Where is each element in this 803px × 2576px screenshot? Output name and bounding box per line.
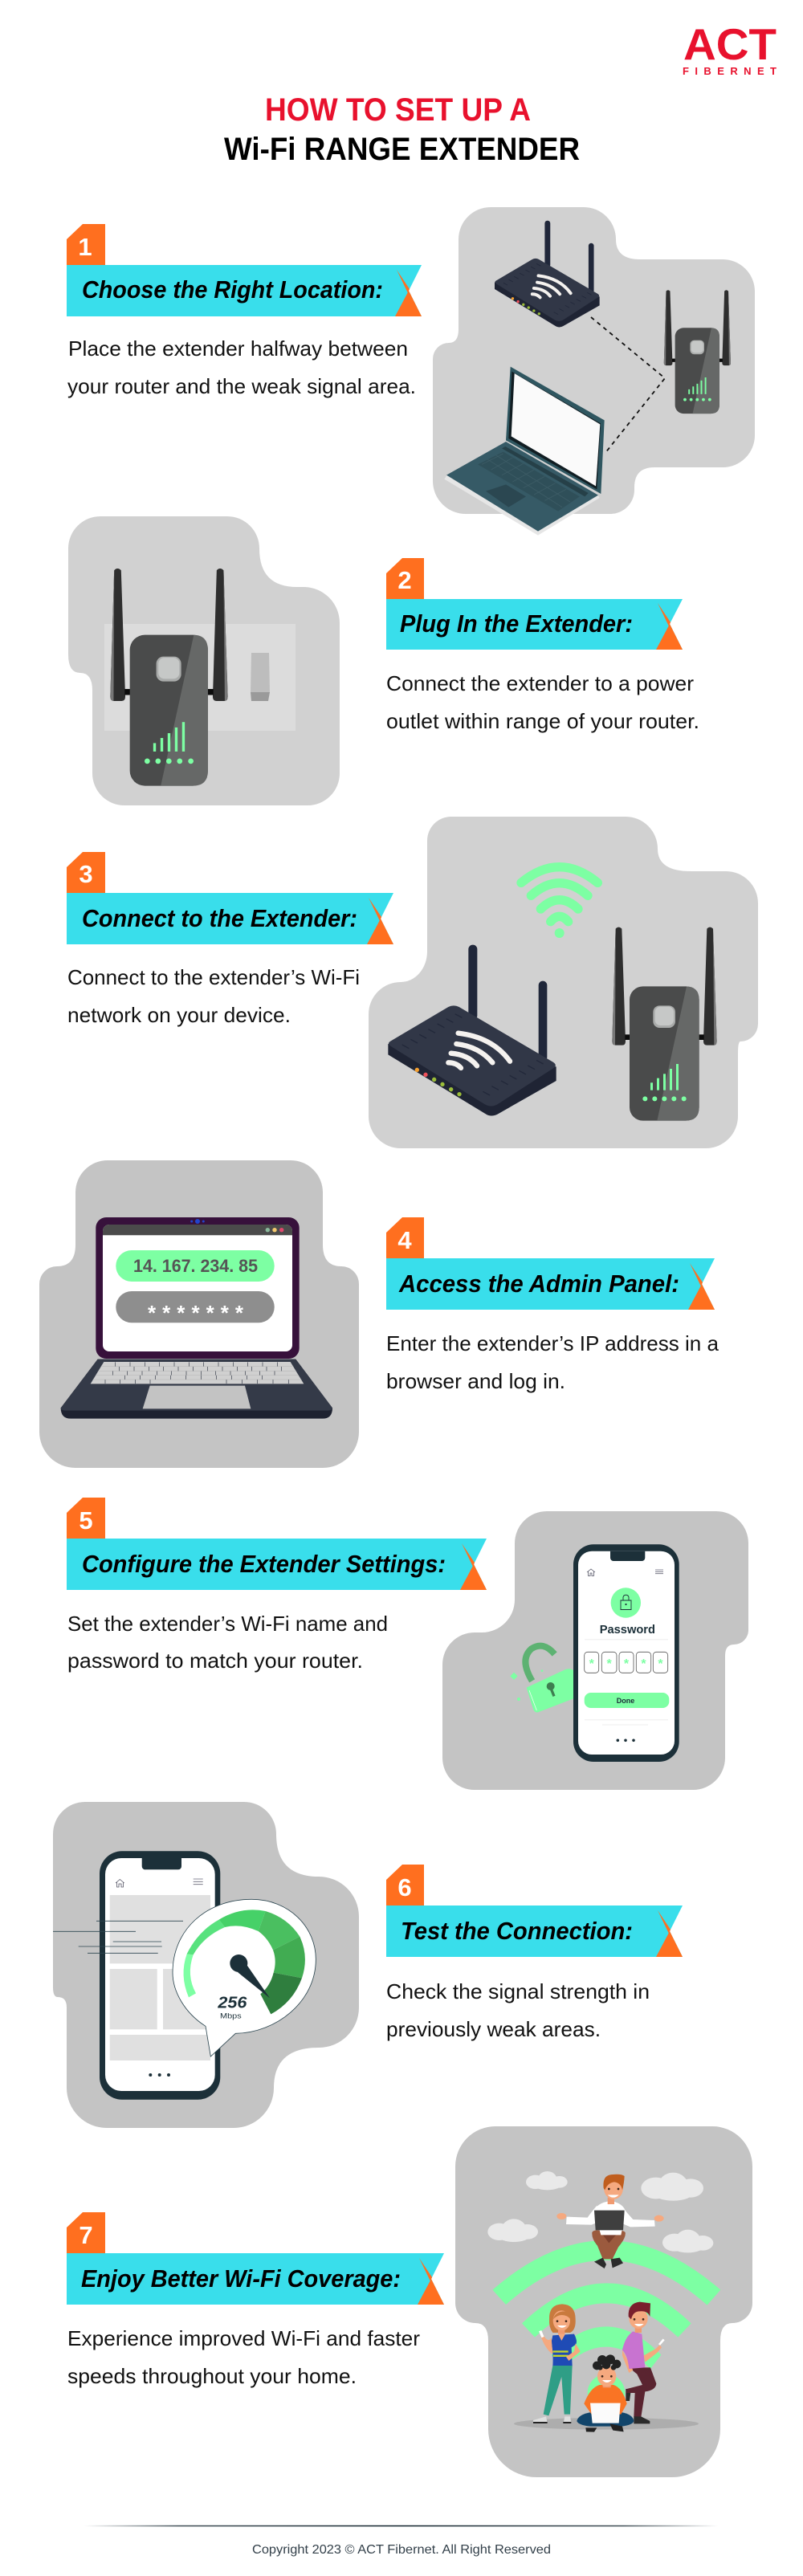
step 7 description: speeds throughout your home. [67,2364,357,2388]
wall plate [104,624,296,731]
step 4 heading banner [386,1258,715,1310]
speedometer bubble: Mbps [220,2011,242,2020]
step 2 illustration panel [68,516,340,805]
step 4 illustration panel [39,1160,359,1468]
icon: laptop with login form [61,1217,332,1419]
step 2 heading banner: Plug In the Extender: [400,609,633,638]
step 3 number badge: 3 [79,860,93,888]
dashed connection lines [591,317,665,454]
step 4 number badge [386,1217,424,1258]
logo: ACT Fibernet: ACT [683,19,777,69]
step 5 description: password to match your router. [67,1649,363,1673]
speedometer bubble: 256 [217,1994,247,2012]
step 6 heading banner: Test the Connection: [401,1917,633,1945]
icon: phone with password screen: * [658,1657,663,1671]
title: HOW TO SET UP A [265,92,531,128]
step 3 description: network on your device. [67,1003,291,1027]
step 4 description: browser and log in. [386,1369,565,1393]
icon: phone with password screen: Password [600,1623,655,1636]
step 4 description [386,1331,719,1393]
icon: extender [110,569,228,786]
icon: router [388,945,556,1115]
step 5 description: Set the extender’s Wi-Fi name and [67,1612,388,1636]
step 6 description: Check the signal strength in [386,1979,650,2003]
title: Wi-Fi RANGE EXTENDER [224,132,580,167]
step 5 description [67,1612,388,1673]
step 7 description: Experience improved Wi-Fi and faster [67,2326,420,2350]
step 4 heading banner: Access the Admin Panel: [398,1270,679,1298]
icon: phone with password screen: * [641,1657,646,1671]
password field [116,1291,275,1325]
wifi arcs [492,2240,720,2411]
step 5 heading banner [67,1539,487,1590]
IP address field: 14. 167. 234. 85 [133,1256,258,1276]
icon: extender [664,290,731,414]
step 1 heading banner: Choose the Right Location: [82,275,383,304]
person: woman with phone [533,2304,581,2423]
step 3 heading banner [67,893,393,944]
logo: ACT Fibernet: FIBERNET [683,65,777,77]
step 5 heading banner: Configure the Extender Settings: [82,1550,446,1578]
step 4 description: Enter the extender’s IP address in a [386,1331,719,1355]
step 1 description: Place the extender halfway between [68,336,408,361]
step 7 illustration panel [455,2126,752,2477]
icon: phone with password screen: * [624,1657,630,1671]
step 2 heading banner [386,599,683,650]
icon: phone with password screen: Done [617,1697,634,1705]
icon: router [495,221,600,328]
step 7 heading banner [67,2253,444,2305]
step 2 number badge: 2 [397,566,412,594]
step 1 number badge: 1 [78,233,92,261]
step 4 number badge: 4 [397,1226,412,1254]
icon: phone with password screen: * [606,1657,612,1671]
step 6 description: previously weak areas. [386,2017,601,2041]
step 6 description [386,1979,650,2041]
laptop base [61,1359,332,1419]
icon: extender [612,927,717,1121]
step 3 description: Connect to the extender’s Wi-Fi [67,965,360,989]
step 7 number badge [67,2212,105,2253]
step 3 description [67,965,360,1027]
icon: phone with speed test [100,1851,220,2100]
icon: phone with password screen: * [589,1657,595,1671]
step 5 illustration panel [442,1511,748,1790]
step 6 illustration panel [53,1802,359,2128]
person: man on top with laptop [556,2175,664,2268]
step 2 description: outlet within range of your router. [386,709,699,733]
step 1 heading banner [67,265,422,316]
illustration: people on wifi signal [487,2171,720,2432]
step 7 heading banner: Enjoy Better Wi-Fi Coverage: [81,2264,401,2293]
footer copyright: Copyright 2023 © ACT Fibernet. All Right Reserved [252,2543,551,2557]
password field: ******* [148,1301,244,1325]
step 3 number badge [67,852,105,893]
clouds [487,2171,713,2252]
step 6 number badge: 6 [397,1873,412,1901]
step 7 description [67,2326,420,2388]
icon: phone with password screen [573,1544,679,1762]
step 7 number badge: 7 [79,2221,93,2249]
person: seated man with laptop [577,2354,634,2432]
icon: laptop [444,367,605,536]
step 1 number badge [67,224,105,265]
icon: open padlock [510,1646,574,1712]
icon: green wifi [521,867,597,938]
step 2 description: Connect the extender to a power [386,671,694,695]
step 2 description [386,671,699,733]
step 1 illustration panel [433,207,755,536]
wall socket plug [251,653,270,701]
step 5 number badge: 5 [79,1506,93,1535]
speedometer bubble [173,1899,316,2056]
step 1 description: your router and the weak signal area. [67,374,416,398]
step 6 number badge [386,1865,424,1906]
person: man with phone [622,2302,664,2423]
title [224,92,580,167]
step 5 number badge [67,1498,105,1539]
step 1 description [67,336,416,398]
step 6 heading banner [386,1906,683,1957]
step 2 number badge [386,558,424,599]
speed lines [53,1921,183,1953]
step 3 illustration panel [369,817,758,1148]
step 3 heading banner: Connect to the Extender: [82,904,357,932]
IP address field [116,1250,275,1282]
